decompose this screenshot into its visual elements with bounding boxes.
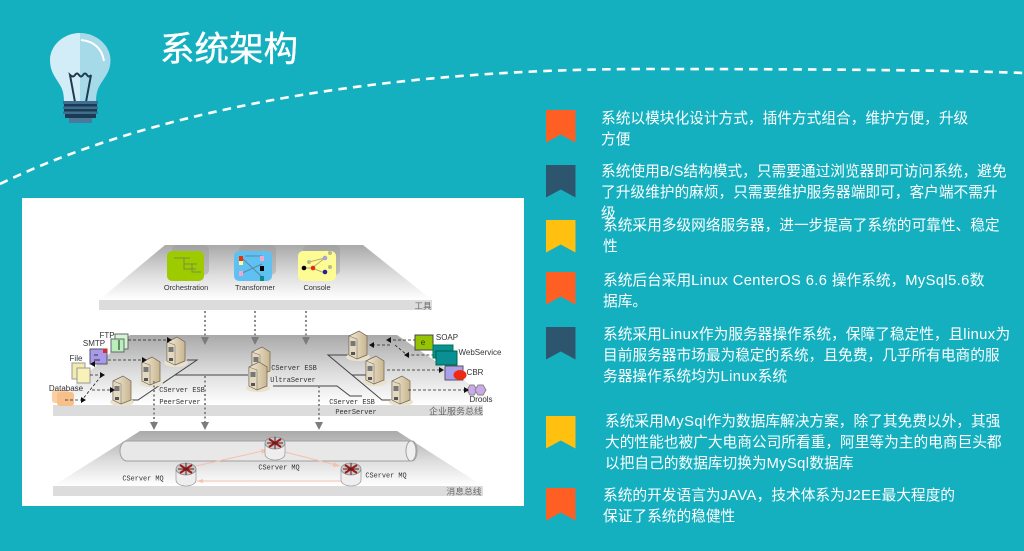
icon: orchestration	[167, 245, 209, 281]
source Drools: Drools	[469, 395, 493, 404]
text 1	[601, 110, 968, 148]
label: Orchestration: Orchestration	[164, 283, 208, 292]
source Database: Database	[49, 384, 84, 393]
labels: CServer MQ: CServer MQ	[122, 476, 164, 484]
source Drools	[467, 385, 493, 404]
bookmark 2	[546, 165, 576, 198]
labels: server names: PeerServer	[335, 409, 377, 417]
label: message bus bar: 消息总线	[446, 486, 482, 496]
central server	[246, 362, 270, 392]
source Database	[49, 384, 84, 406]
text 7: 保证了系统的稳健性	[603, 509, 735, 525]
source FTP: FTP	[99, 331, 115, 340]
text 6: 系统采用MySql作为数据库解决方案，除了其免费以外，其强	[605, 414, 1000, 430]
labels: CServer MQ: CServer MQ	[258, 464, 300, 472]
text 3	[603, 217, 1000, 255]
connector arrows left	[65, 337, 172, 403]
text 5: 目前服务器市场最为稳定的系统，且免费，几乎所有电商的服	[603, 348, 1000, 364]
text 4: 系统后台采用Linux CenterOS 6.6 操作系统，MySql5.6数	[603, 273, 984, 289]
icon: light bulb	[50, 33, 110, 123]
text 6: 大的性能也被广大电商公司所看重，阿里等为主的电商巨头都	[605, 435, 1002, 451]
title: 系统架构	[160, 31, 298, 69]
source WebService	[433, 345, 502, 365]
text 7	[603, 487, 955, 525]
icon: console	[298, 245, 340, 281]
icon: transformer	[234, 245, 276, 281]
servers	[110, 331, 413, 406]
labels: server names: PeerServer	[159, 399, 201, 407]
layer: message bus	[53, 431, 483, 496]
text 3: 系统采用多级网络服务器，进一步提高了系统的可靠性、稳定	[603, 218, 1000, 234]
connector arrows right	[369, 337, 469, 393]
source FTP	[99, 331, 128, 352]
text 2: 级	[601, 206, 616, 222]
bookmark 6	[546, 416, 576, 448]
text 6: 以把自己的数据库切换为MySql数据库	[605, 456, 853, 472]
arrows: tools to bus	[201, 311, 310, 345]
label: enterprise bus bar: 企业服务总线	[429, 406, 483, 416]
text 4: 据库。	[603, 294, 647, 310]
labels: CServer MQ	[122, 464, 407, 484]
text 1: 方便	[601, 132, 630, 148]
labels: server names: UltraServer	[270, 377, 316, 385]
labels: server names: CServer ESB	[159, 387, 205, 395]
labels: CServer MQ: CServer MQ	[365, 472, 407, 480]
source File: File	[70, 354, 83, 363]
layer: enterprise service bus	[49, 331, 502, 417]
label: Console: Console	[303, 283, 331, 292]
label: Transformer: Transformer	[235, 283, 276, 292]
bookmark 3	[546, 220, 576, 252]
source SOAP: SOAP	[436, 333, 458, 342]
text 2	[601, 163, 1007, 222]
text 7: 系统的开发语言为JAVA，技术体系为J2EE最大程度的	[603, 488, 955, 504]
labels: server names: CServer ESB	[329, 399, 375, 407]
text 1: 系统以模块化设计方式，插件方式组合，维护方便，升级	[601, 111, 968, 127]
bus lines	[131, 355, 392, 400]
source SOAP: e	[421, 338, 426, 347]
text 3: 性	[603, 239, 618, 255]
text 4	[603, 272, 984, 310]
text 5: 系统采用Linux作为服务器操作系统，保障了稳定性，且linux为	[603, 327, 1010, 343]
source File	[70, 354, 90, 383]
arrows: bus to message bus	[150, 376, 323, 430]
source SOAP	[415, 333, 458, 350]
label: tools bar: 工具	[414, 301, 432, 311]
panel: architecture diagram	[22, 198, 524, 506]
text 2: 系统使用B/S结构模式，只需要通过浏览器即可访问系统，避免	[601, 164, 1007, 180]
bookmark 5	[546, 327, 576, 360]
routing lines	[196, 449, 342, 483]
source SMTP	[83, 339, 107, 364]
bookmark 1	[546, 110, 576, 142]
routers	[176, 437, 361, 486]
text 2: 了升级维护的麻烦，只需要维护服务器端即可，客户端不需升	[601, 185, 998, 201]
text 5	[603, 326, 1010, 385]
source CBR: CBR	[467, 368, 484, 377]
source SMTP: SMTP	[83, 339, 105, 348]
pipe	[120, 441, 417, 461]
text 5: 务器操作系统均为Linux系统	[603, 369, 787, 385]
text 6	[605, 413, 1002, 472]
source WebService: WebService	[459, 348, 502, 357]
bookmark 7	[546, 488, 576, 520]
labels: server names	[159, 365, 377, 417]
layer: tools	[99, 245, 432, 311]
bookmark 4	[546, 272, 576, 304]
labels: server names: CServer ESB	[271, 365, 317, 373]
source CBR	[445, 366, 484, 380]
